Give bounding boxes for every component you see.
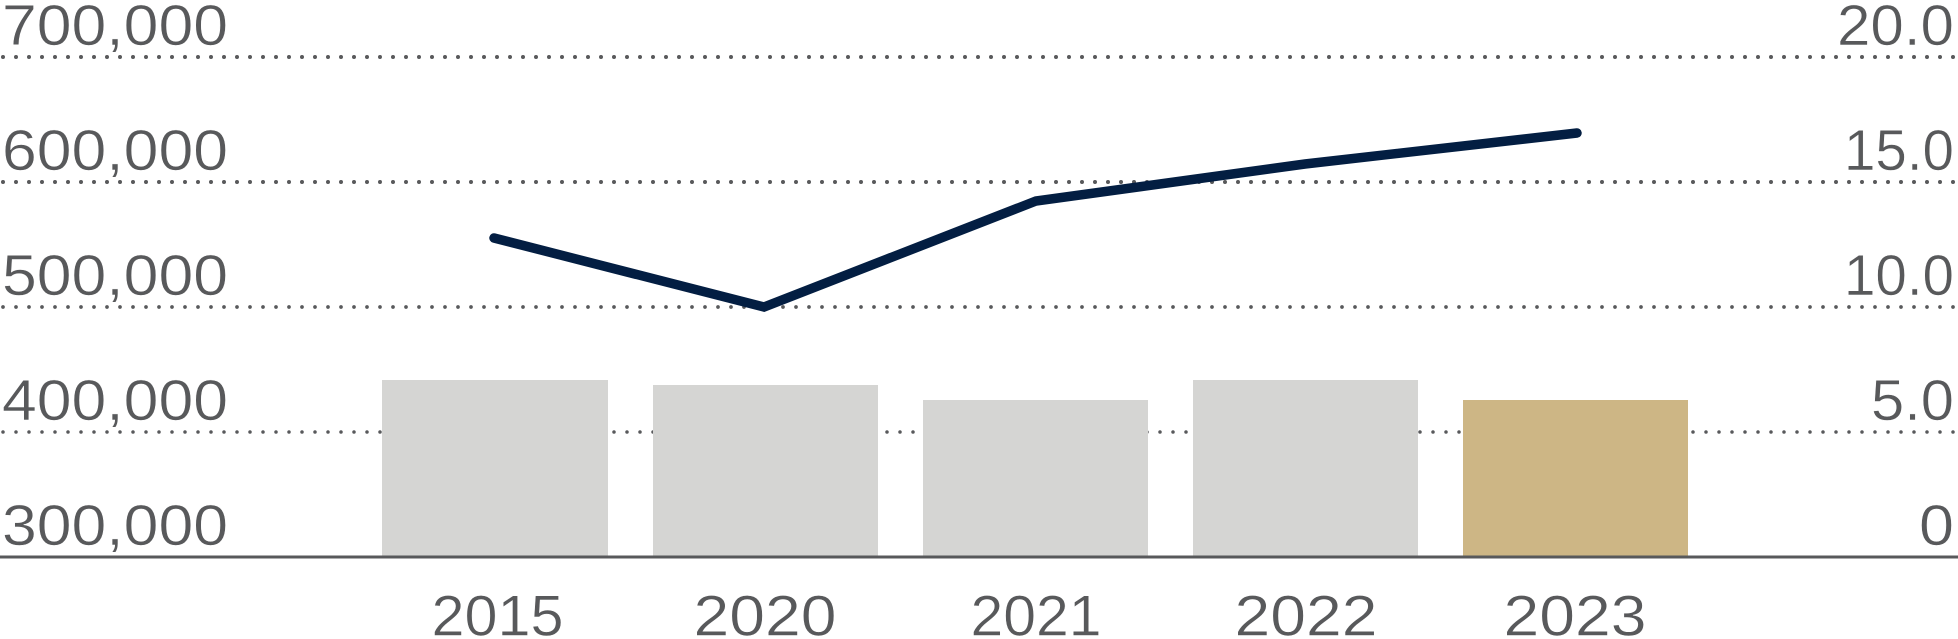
bar: 2021 — [923, 400, 1148, 556]
left axis labels: 400,000 — [2, 369, 228, 433]
bar: 2015 — [382, 380, 608, 556]
right axis labels: 0 — [1919, 494, 1954, 558]
right axis labels: 15.0 — [1844, 119, 1954, 183]
bar: 2022 — [1193, 380, 1418, 556]
right axis labels — [1837, 0, 1954, 558]
right axis labels: 10.0 — [1844, 244, 1954, 308]
left axis labels: 500,000 — [2, 244, 228, 308]
left axis labels: 600,000 — [2, 119, 228, 183]
bar: 2023 — [1463, 400, 1688, 556]
left axis labels: 300,000 — [2, 494, 228, 558]
x axis line — [0, 556, 1958, 558]
bars — [382, 380, 1688, 556]
trend line — [494, 133, 1577, 307]
year labels — [432, 584, 1646, 639]
right axis labels: 5.0 — [1871, 369, 1954, 433]
left axis labels — [2, 0, 228, 558]
bar: 2020 — [653, 385, 878, 556]
